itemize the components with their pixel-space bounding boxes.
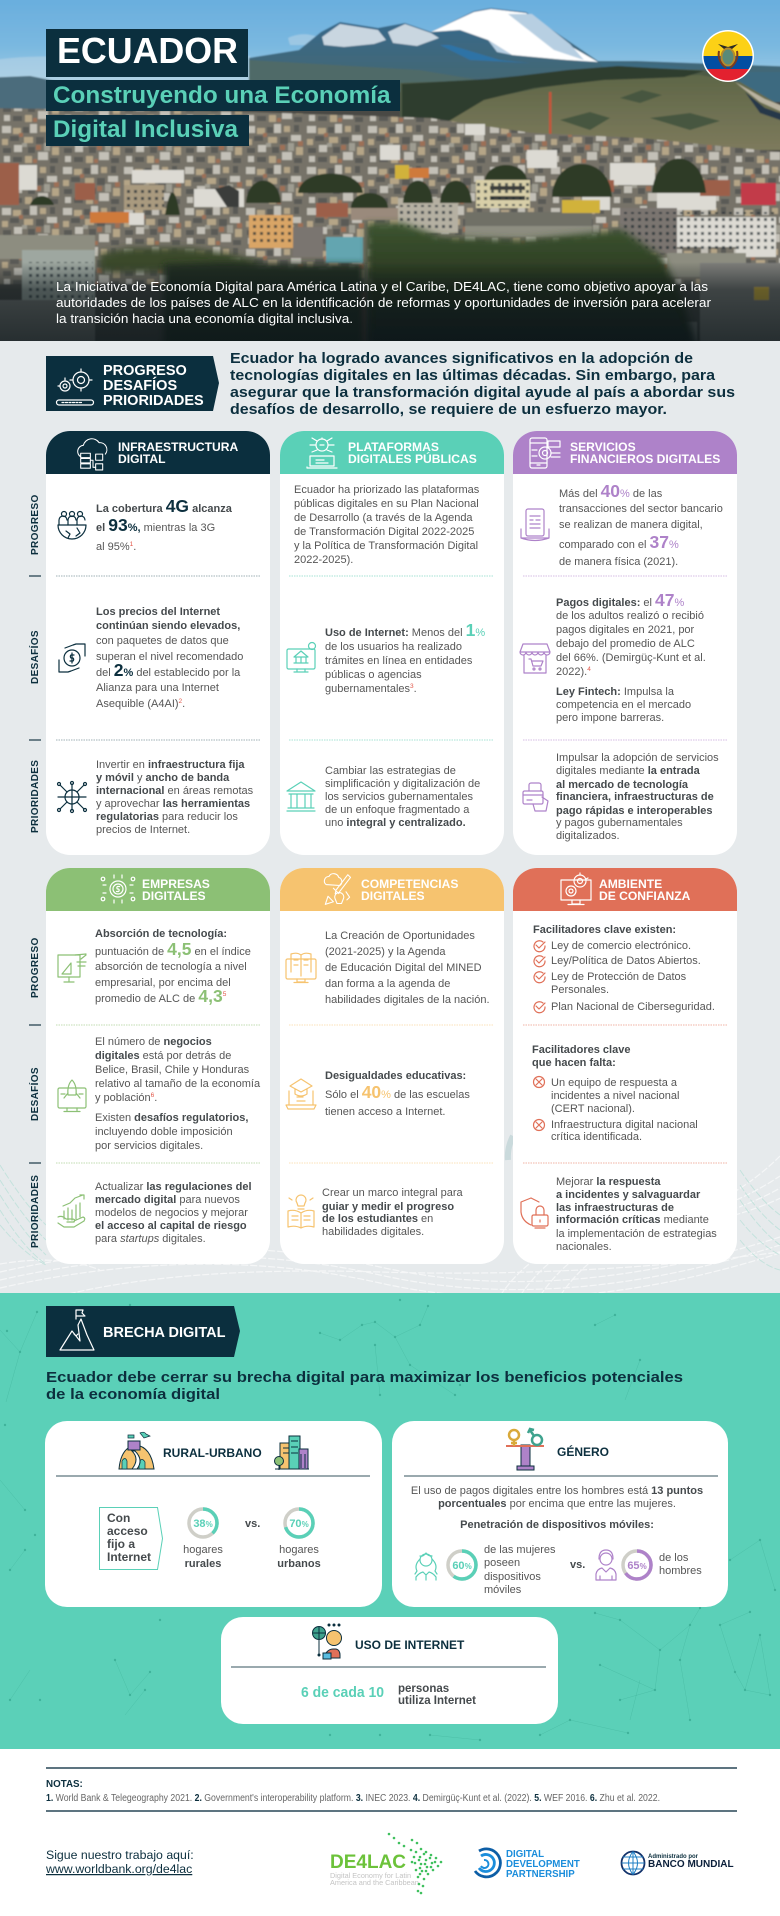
text: prioridades: Mejorar la respuesta [556,1176,661,1188]
text: desafíos: pagos digitales en 2021, por [556,624,695,636]
grey section background [0,341,780,1294]
text: progreso: transacciones del sector bancario [559,503,723,515]
text: prioridades: Impulsar la adopción de servicios [556,752,719,764]
follow link: www.worldbank.org/de4lac [45,1862,192,1876]
text: prioridades: Crear un marco integral para [322,1187,464,1199]
text: personas: utiliza Internet [398,1695,476,1707]
text: desafíos: trámites en línea en entidades [325,655,473,667]
callout: con acceso fijo a internet [100,1508,162,1570]
icons: x marks [534,1076,544,1130]
list: facilitadores existen: Ley de Protección de Datos [551,971,687,983]
text: prioridades: nacionales. [556,1241,612,1253]
text: desafíos: de los adultos realizó o recibió [556,610,704,622]
header: infraestructura digital [46,431,270,474]
text: progreso: Más del 40% de las [559,481,663,501]
text: progreso: habilidades digitales de la nación. [325,994,490,1006]
logo: digital development partnership: DIGITAL [506,1849,544,1860]
text: progreso [95,928,251,1006]
header: empresas digitales: DIGITALES [142,889,206,903]
chart: hombres 65% [623,1551,651,1579]
text: desafíos: con paquetes de datos que [96,635,229,647]
lead paragraph: desafíos de desarrollo, se requiere de un esfuerzo mayor. [230,401,667,418]
header: plataformas: DIGITALES PÚBLICAS [348,451,477,466]
text: prioridades: las infraestructuras de [556,1202,674,1214]
notes: 1. World Bank & Telegeography 2021. 2. Government's interoperability platform. 3. INEC 2023. 4. Demirgüç-Kunt et al. (2022). 5. WEF 2016. 6. Zhu et al. 2022. [46,1793,660,1804]
logo: banco mundial [622,1852,734,1874]
chart: mujeres 60% [448,1551,476,1579]
icon: chart on screen [58,954,86,982]
text: desafíos: Pagos digitales: el 47% [556,590,685,610]
text: desafíos: . [154,1092,157,1104]
icon: book with light bulb [288,1195,314,1228]
text: prioridades: la implementación de estrategias [556,1228,717,1240]
header: empresas digitales [46,868,270,911]
text: prioridades: financiera, infraestructuras de [556,791,714,803]
text: progreso: Ecuador ha priorizado las plataformas [294,484,480,496]
logo: DE4LAC: Digital Economy for Latin [330,1871,411,1880]
header: plataformas: PLATAFORMAS [348,440,439,454]
text: brecha de pagos [411,1485,703,1531]
text: progreso: y la Política de Transformación Digital [294,540,478,552]
panel: rural-urbano [45,1421,382,1607]
text: prioridades: simplificación y digitalización de [325,778,480,790]
panel: rural-urbano: RURAL-URBANO [163,1446,262,1460]
icon: hand with card [523,783,548,811]
hero photo [0,0,780,360]
header: competencias digitales: DIGITALES [361,889,425,903]
text: prioridades: Actualizar las regulaciones del [95,1181,252,1193]
text: mujeres: de las mujeres [484,1544,556,1556]
text: desafíos: 3 [410,683,414,690]
text: prioridades: Cambiar las estrategias de [325,765,456,777]
icon: gender scale [506,1429,544,1470]
text: progreso: puntuación de 4,5 en el índice [95,939,251,959]
text: progreso: el 93%, mientras la 3G [96,515,215,535]
list: facilitadores faltan [532,1044,698,1143]
title: ECUADOR: ECUADOR [57,31,238,71]
row labels, second row: PROGRESO [30,937,41,998]
text: prioridades: al mercado de tecnología [556,779,689,791]
text: progreso [325,930,490,1006]
icon: book on screen [286,953,316,982]
text: prioridades: habilidades digitales. [322,1226,424,1238]
text: brecha de pagos: Penetración de dispositivos móviles: [460,1519,654,1531]
hero intro text: autoridades de los países de ALC en la identificación de reformas y oportunidades de inversión para acelerar [56,295,712,310]
logo: DE4LAC: DE4LAC [330,1852,406,1873]
panel: género: GÉNERO [557,1444,609,1459]
icon: hand with growth chart [58,1195,85,1227]
icon: woman [415,1553,437,1580]
icon: person with globe [312,1625,342,1659]
flag of Ecuador [700,30,756,83]
text: desafíos: Asequible (A4AI) [96,698,179,710]
callout: con acceso fijo a internet: Internet [107,1550,151,1564]
text: prioridades [322,1187,464,1238]
text: mujeres: poseen [484,1557,520,1569]
text: progreso: La cobertura 4G alcanza [96,496,233,516]
icon: people on globe [58,512,86,539]
subtitle [46,80,400,146]
logo: banco mundial: Administrado por [648,1854,699,1860]
icon: online shop [520,644,550,673]
header: ambiente de confianza: DE CONFIANZA [599,889,691,903]
header: plataformas [280,431,504,474]
header: servicios financieros [513,431,737,474]
text: prioridades: guiar y medir el progreso [322,1201,454,1213]
chart: urbano 70%: hogares [279,1544,319,1556]
icon: bank building [287,782,315,811]
text: desafíos: Los precios del Internet [96,606,220,618]
icon: hand with money [59,644,85,672]
heading: brecha digital: Ecuador debe cerrar su brecha digital para maximizar los beneficios potenciales [46,1369,683,1386]
text: mujeres: móviles [484,1584,522,1596]
list: facilitadores existen: Plan Nacional de Ciberseguridad. [551,1001,715,1013]
text: desafíos: públicas o agencias [325,669,422,681]
hero intro text: La Iniciativa de Economía Digital para América Latina y el Caribe, DE4LAC, tiene como objetivo apoyar a las [56,279,709,294]
text: prioridades [556,752,719,842]
heading: brecha digital: de la economía digital [46,1386,220,1403]
text: progreso: La Creación de Oportunidades [325,930,475,942]
text: prioridades: precios de Internet. [96,824,190,836]
network pattern [0,1300,775,1740]
text: desafíos: de los usuarios ha realizado [325,641,462,653]
list: facilitadores existen: Ley de comercio electrónico. [551,940,691,952]
notes [46,1767,737,1812]
text: prioridades: los servicios gubernamentales [325,791,473,803]
text: progreso [96,496,233,553]
follow link [45,1848,194,1876]
row labels, second row: PRIORIDADES [30,1175,41,1248]
text: desafíos [325,620,485,695]
panel: infraestructura digital [46,431,270,855]
text: progreso: (2021-2025) y la Agenda [325,946,446,958]
tag: progreso desafíos prioridades: DESAFÍOS [103,377,177,394]
text: prioridades: el acceso al capital de riesgo [95,1220,247,1232]
header: competencias digitales: COMPETENCIAS [361,877,458,891]
text: brecha de pagos: porcentuales por encima que entre las mujeres. [438,1498,676,1510]
text: desafíos: Ley Fintech: Impulsa la [556,686,675,698]
hero intro text: la transición hacia una economía digital inclusiva. [56,311,353,326]
text: progreso: comparado con el 37% [559,532,679,552]
text: desafíos: debajo del promedio de ALC [556,638,695,650]
chart: rural 38%: rurales [185,1558,221,1570]
panel: uso de internet: USO DE INTERNET [355,1638,465,1652]
text: desafíos [556,590,706,724]
text: prioridades: para startups digitales. [95,1233,206,1245]
text: prioridades: información críticas mediante [556,1214,709,1226]
header: infraestructura digital: INFRAESTRUCTURA [118,440,239,454]
text: prioridades: digitalizados. [556,830,620,842]
text: prioridades [95,1181,252,1245]
lead paragraph: Ecuador ha logrado avances significativos en la adopción de [230,350,693,367]
text: desafíos: y población [95,1092,151,1104]
text: prioridades: Invertir en infraestructura fija [96,759,245,771]
text: personas [398,1683,476,1707]
panel: plataformas digitales públicas [280,431,504,855]
text: progreso: de Educación Digital del MINED [325,962,482,974]
row labels, second row: DESAFÍOS [28,1067,41,1121]
text: progreso: 2022-2025). [294,554,353,566]
text: mujeres: dispositivos [484,1571,541,1583]
logo: digital development partnership: DEVELOPMENT [506,1859,580,1870]
text: desafíos: superan el nivel recomendado [96,651,243,663]
text: desafíos: relativo al tamaño de la economía [95,1078,261,1090]
header: ambiente de confianza [513,868,737,911]
text: desafíos: digitales está por detrás de [95,1050,231,1062]
lead paragraph: asegurar que la transformación digital ayude al país a abordar sus [230,384,735,401]
tag: progreso desafíos prioridades: PRIORIDADES [103,393,204,409]
text: brecha de pagos: El uso de pagos digitales entre los hombres está 13 puntos [411,1485,703,1497]
text: desafíos: por servicios digitales. [95,1140,203,1152]
text: progreso: de Desarrollo (a través de la Agenda [294,512,473,524]
text: progreso: 1 [130,541,134,548]
tag: progreso desafíos prioridades: PROGRESO [103,363,187,379]
text: prioridades: mercado digital para nuevos [95,1194,240,1206]
lead paragraph: tecnologías digitales en las últimas décadas. Sin embargo, para [230,367,716,384]
text: progreso: absorción de tecnología a nivel [95,961,247,973]
chart: urbano 70% [277,1509,321,1570]
list: facilitadores faltan: Un equipo de respuesta a [551,1077,678,1089]
subtitle: Construyendo una Economía [53,82,391,109]
text: prioridades: pago rápidas e interoperables [556,805,712,817]
text: prioridades: internacional en áreas remotas [96,785,254,797]
panel: competencias digitales [280,868,504,1264]
chart: rural 38% [183,1509,223,1570]
callout: con acceso fijo a internet: fijo a [107,1537,135,1551]
text: desafíos [96,606,243,710]
icon: network globe [58,782,86,812]
text: desafíos: 2 [179,698,183,705]
header: empresas digitales: EMPRESAS [142,877,210,891]
text: desafíos: pero impone barreras. [556,712,664,724]
text: desafíos: El número de negocios [95,1036,212,1048]
label: vs: vs. [570,1559,585,1571]
text: progreso [559,481,723,568]
text: progreso: promedio de ALC de 4,3 [95,986,223,1006]
list: facilitadores faltan: Facilitadores clave [532,1044,630,1056]
icon: mountain with flag [60,1310,94,1350]
text: desafíos: Desigualdades educativas: [325,1070,466,1082]
tag: brecha digital [46,1306,240,1357]
follow link: Sigue nuestro trabajo aquí: [46,1848,194,1862]
text: prioridades: digitales mediante la entrada [556,765,701,777]
text: progreso: Absorción de tecnología: [95,928,227,940]
text: desafíos: Uso de Internet: Menos del 1% [325,620,485,640]
text: prioridades: a incidentes y salvaguardar [556,1189,701,1201]
stat: 6 de cada 10: 6 de cada 10 [301,1685,384,1701]
subtitle: Digital Inclusiva [53,116,238,143]
text: desafíos: 6 [151,1092,155,1099]
text: desafíos [95,1036,261,1152]
text: prioridades: de un enfoque fragmentado a [325,804,470,816]
logo: DE4LAC: America and the Caribbean [330,1878,419,1887]
list: facilitadores existen: Personales. [551,984,609,996]
chart: rural 38%: 38% [193,1518,213,1530]
wave background pattern [0,1136,780,1298]
icon: rural landscape [119,1432,154,1469]
text: prioridades [556,1176,717,1253]
list: facilitadores faltan: (CERT nacional). [551,1103,635,1115]
text: prioridades: uno integral y centralizado. [325,817,466,829]
text: progreso: 5 [223,991,227,998]
text: desafíos [325,1070,470,1118]
text: hombres [659,1552,702,1577]
list: facilitadores faltan: Infraestructura digital nacional [551,1119,698,1131]
list: facilitadores faltan: incidentes a nivel nacional [551,1090,679,1102]
text: hombres: de los [659,1552,689,1564]
row labels, first row: PROGRESO [30,494,41,555]
text: desafíos: del 66%. (Demirgüç-Kunt et al. [556,652,706,664]
panel: servicios financieros digitales [513,431,737,855]
text: prioridades: y pagos gubernamentales [556,817,683,829]
logo: digital development partnership: PARTNERSHIP [506,1869,575,1880]
text: progreso: dan forma a la agenda de [325,978,450,990]
text: mujeres [484,1544,556,1596]
text: desafíos: gubernamentales [325,683,410,695]
teal section background [0,1293,780,1749]
icon: shield with lock [521,1198,548,1228]
text: progreso: . [133,541,136,553]
list: facilitadores existen [533,924,715,1013]
icon: rocket on screen [58,1080,86,1112]
panel: género [392,1421,728,1607]
row labels, first row: PRIORIDADES [30,760,41,833]
icon: gears [56,369,94,405]
list: facilitadores existen: Ley/Política de Datos Abiertos. [551,955,701,967]
chart: mujeres 60%: 60% [452,1560,472,1572]
row labels, first row: DESAFÍOS [28,630,41,684]
text: progreso: públicas digitales en su Plan Nacional [294,498,479,510]
notes: NOTAS: [46,1779,83,1790]
text: prioridades: y aprovechar las herramientas [96,798,250,810]
icons: check marks [534,941,545,1013]
callout: con acceso fijo a internet: acceso [107,1524,148,1538]
hero intro text [56,279,712,326]
text: progreso: empresarial, por encima del [95,977,231,989]
icon: phone with dollar [521,509,549,540]
header: ambiente de confianza: AMBIENTE [599,877,662,891]
text: desafíos: . [414,683,417,695]
text: hombres: hombres [659,1565,702,1577]
text: progreso: de manera física (2021). [559,556,678,568]
text: desafíos: continúan siendo elevados, [96,620,240,632]
chart: urbano 70%: urbanos [277,1558,321,1570]
text: progreso [294,484,480,566]
header: infraestructura digital: DIGITAL [118,452,166,466]
list: facilitadores existen: Facilitadores clave existen: [533,924,676,936]
text: desafíos: . [182,698,185,710]
icon: graduate on laptop [286,1079,316,1109]
text: desafíos: Belice, Brasil, Chile y Honduras [95,1064,250,1076]
panel: empresas digitales [46,868,270,1264]
list: facilitadores faltan: que hacen falta: [532,1057,616,1069]
text: desafíos: 2022). [556,666,587,678]
label: vs: vs. [245,1518,260,1530]
logo: digital development partnership [475,1849,580,1880]
text: prioridades: modelos de negocios y mejorar [95,1207,248,1219]
chart: urbano 70%: 70% [289,1518,309,1530]
chart: rural 38%: hogares [183,1544,223,1556]
header: servicios financieros: SERVICIOS [570,440,636,454]
text: prioridades: de los estudiantes en [322,1213,433,1225]
panel: uso de internet [221,1617,558,1724]
text: progreso: al 95% [96,541,130,553]
list: facilitadores faltan: crítica identificada. [551,1131,642,1143]
text: desafíos: Existen desafíos regulatorios, [95,1112,248,1124]
lead paragraph [230,350,735,418]
text: desafíos: tienen acceso a Internet. [325,1106,445,1118]
text: progreso: de Transformación Digital 2022-2025 [294,526,474,538]
header: competencias digitales [280,868,504,911]
text: prioridades [325,765,480,829]
text: desafíos: 4 [587,666,591,673]
chart: hombres 65%: 65% [627,1560,647,1572]
icon: man [596,1550,616,1580]
tag: brecha digital: BRECHA DIGITAL [103,1325,226,1341]
text: desafíos: competencia en el mercado [556,699,691,711]
logo: banco mundial: BANCO MUNDIAL [648,1859,734,1870]
row labels, first row [28,494,41,833]
header: servicios financieros: FINANCIEROS DIGITALES [570,452,720,466]
text: progreso: se realizan de manera digital, [559,519,703,531]
text: prioridades: regulatorias para reducir los [96,811,238,823]
icon: government on screen [287,642,316,672]
icon: city [274,1436,309,1470]
text: desafíos: incluyendo doble imposición [95,1126,233,1138]
panel: ambiente de confianza [513,868,737,1264]
text: desafíos: Alianza para una Internet [96,682,219,694]
text: desafíos: del 2% del establecido por la [96,660,241,680]
text: prioridades: y móvil y ancho de banda [96,772,230,784]
callout: con acceso fijo a internet: Con [107,1511,130,1525]
heading: brecha digital [46,1369,683,1403]
tag: progreso desafíos prioridades [46,356,219,411]
logo: DE4LAC [330,1834,441,1893]
text: desafíos: Sólo el 40% de las escuelas [325,1082,470,1102]
text: prioridades [96,759,254,836]
text: personas: personas [398,1683,449,1695]
row labels, second row [28,937,41,1248]
